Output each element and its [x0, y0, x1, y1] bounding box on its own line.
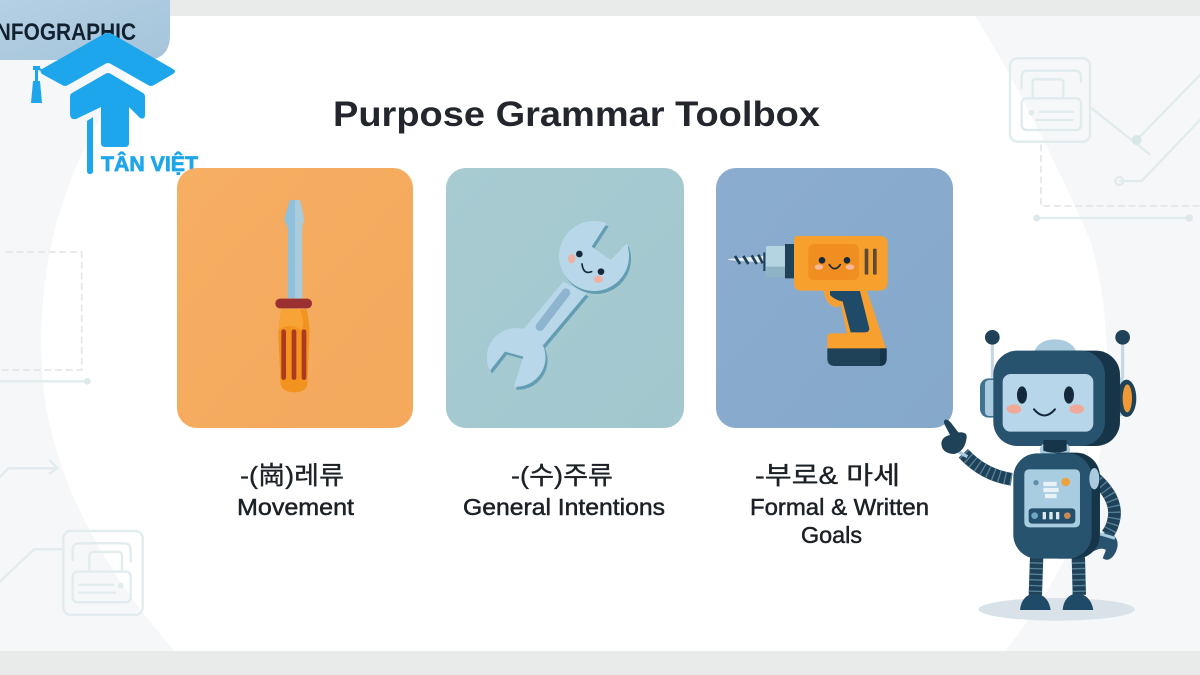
title: Purpose Grammar Toolbox [333, 95, 821, 134]
label: movement: Movement [237, 494, 355, 520]
background circuit decoration: top right [1010, 58, 1200, 222]
background circuit decoration: left side [0, 252, 143, 615]
label: general intentions: -(수)주류 [511, 462, 613, 490]
logo: Tân Việt graduation cap with arrow [31, 33, 198, 176]
label: formal and written goals: Goals [801, 522, 862, 548]
panel: drill card [716, 168, 953, 428]
header tab [0, 0, 170, 60]
icon: power drill [728, 236, 888, 366]
panel: screwdriver card [177, 168, 413, 428]
robot mascot pointing at the cards [941, 330, 1136, 621]
label: general intentions: General Intentions [463, 494, 665, 520]
panel: wrench card [446, 168, 684, 428]
icon: wrench [487, 221, 631, 390]
label: formal and written goals: Formal & Written [750, 494, 929, 520]
label: movement: -(崗)레류 [240, 462, 344, 490]
label: movement [237, 462, 355, 520]
label: formal and written goals: -부로& 마세 [755, 462, 900, 490]
logo: Tân Việt graduation cap with arrow: TÂN VIỆT [101, 152, 198, 176]
icon: screwdriver [275, 200, 312, 392]
label: formal and written goals [750, 462, 929, 548]
label: general intentions [463, 462, 665, 520]
